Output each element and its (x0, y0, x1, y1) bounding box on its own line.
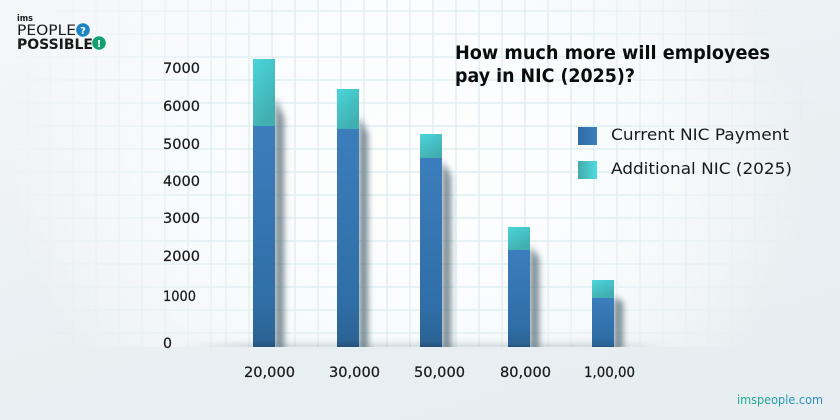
bar: 30,000 (337, 89, 359, 347)
y axis labels: 0 (163, 336, 172, 352)
title: How much more will employees (455, 42, 770, 64)
y axis labels: 4000 (163, 174, 200, 190)
logo: POSSIBLE (17, 37, 93, 53)
x axis labels (244, 365, 635, 381)
logo: ims (17, 14, 33, 24)
x axis labels: 20,000 (244, 365, 295, 381)
bar chart (180, 59, 670, 352)
y axis labels (163, 61, 200, 352)
bar: 50,000 (420, 134, 442, 347)
y axis labels: 5000 (163, 137, 200, 153)
logo (17, 14, 106, 53)
x axis labels: 30,000 (329, 365, 380, 381)
y axis labels: 7000 (163, 61, 200, 77)
x axis labels: 50,000 (414, 365, 465, 381)
x axis labels: 1,00,00 (584, 365, 635, 381)
x axis labels: 80,000 (500, 365, 551, 381)
bar: 80,000 (508, 227, 530, 347)
y axis labels: 6000 (163, 99, 200, 115)
website url: imspeople.com (737, 392, 823, 407)
logo: ! (97, 39, 101, 50)
logo: PEOPLE (17, 23, 76, 39)
y axis labels: 1000 (163, 289, 196, 305)
legend: additional NIC: Additional NIC (2025) (611, 159, 792, 178)
title (455, 42, 770, 87)
bar: 1,00,00 (592, 280, 614, 347)
y axis labels: 2000 (163, 249, 200, 265)
bar: 20,000 (253, 59, 275, 347)
legend (578, 125, 792, 179)
title: pay in NIC (2025)? (455, 65, 635, 87)
legend: current NIC payment: Current NIC Payment (611, 125, 789, 144)
logo: ? (80, 26, 86, 37)
y axis labels: 3000 (163, 211, 200, 227)
